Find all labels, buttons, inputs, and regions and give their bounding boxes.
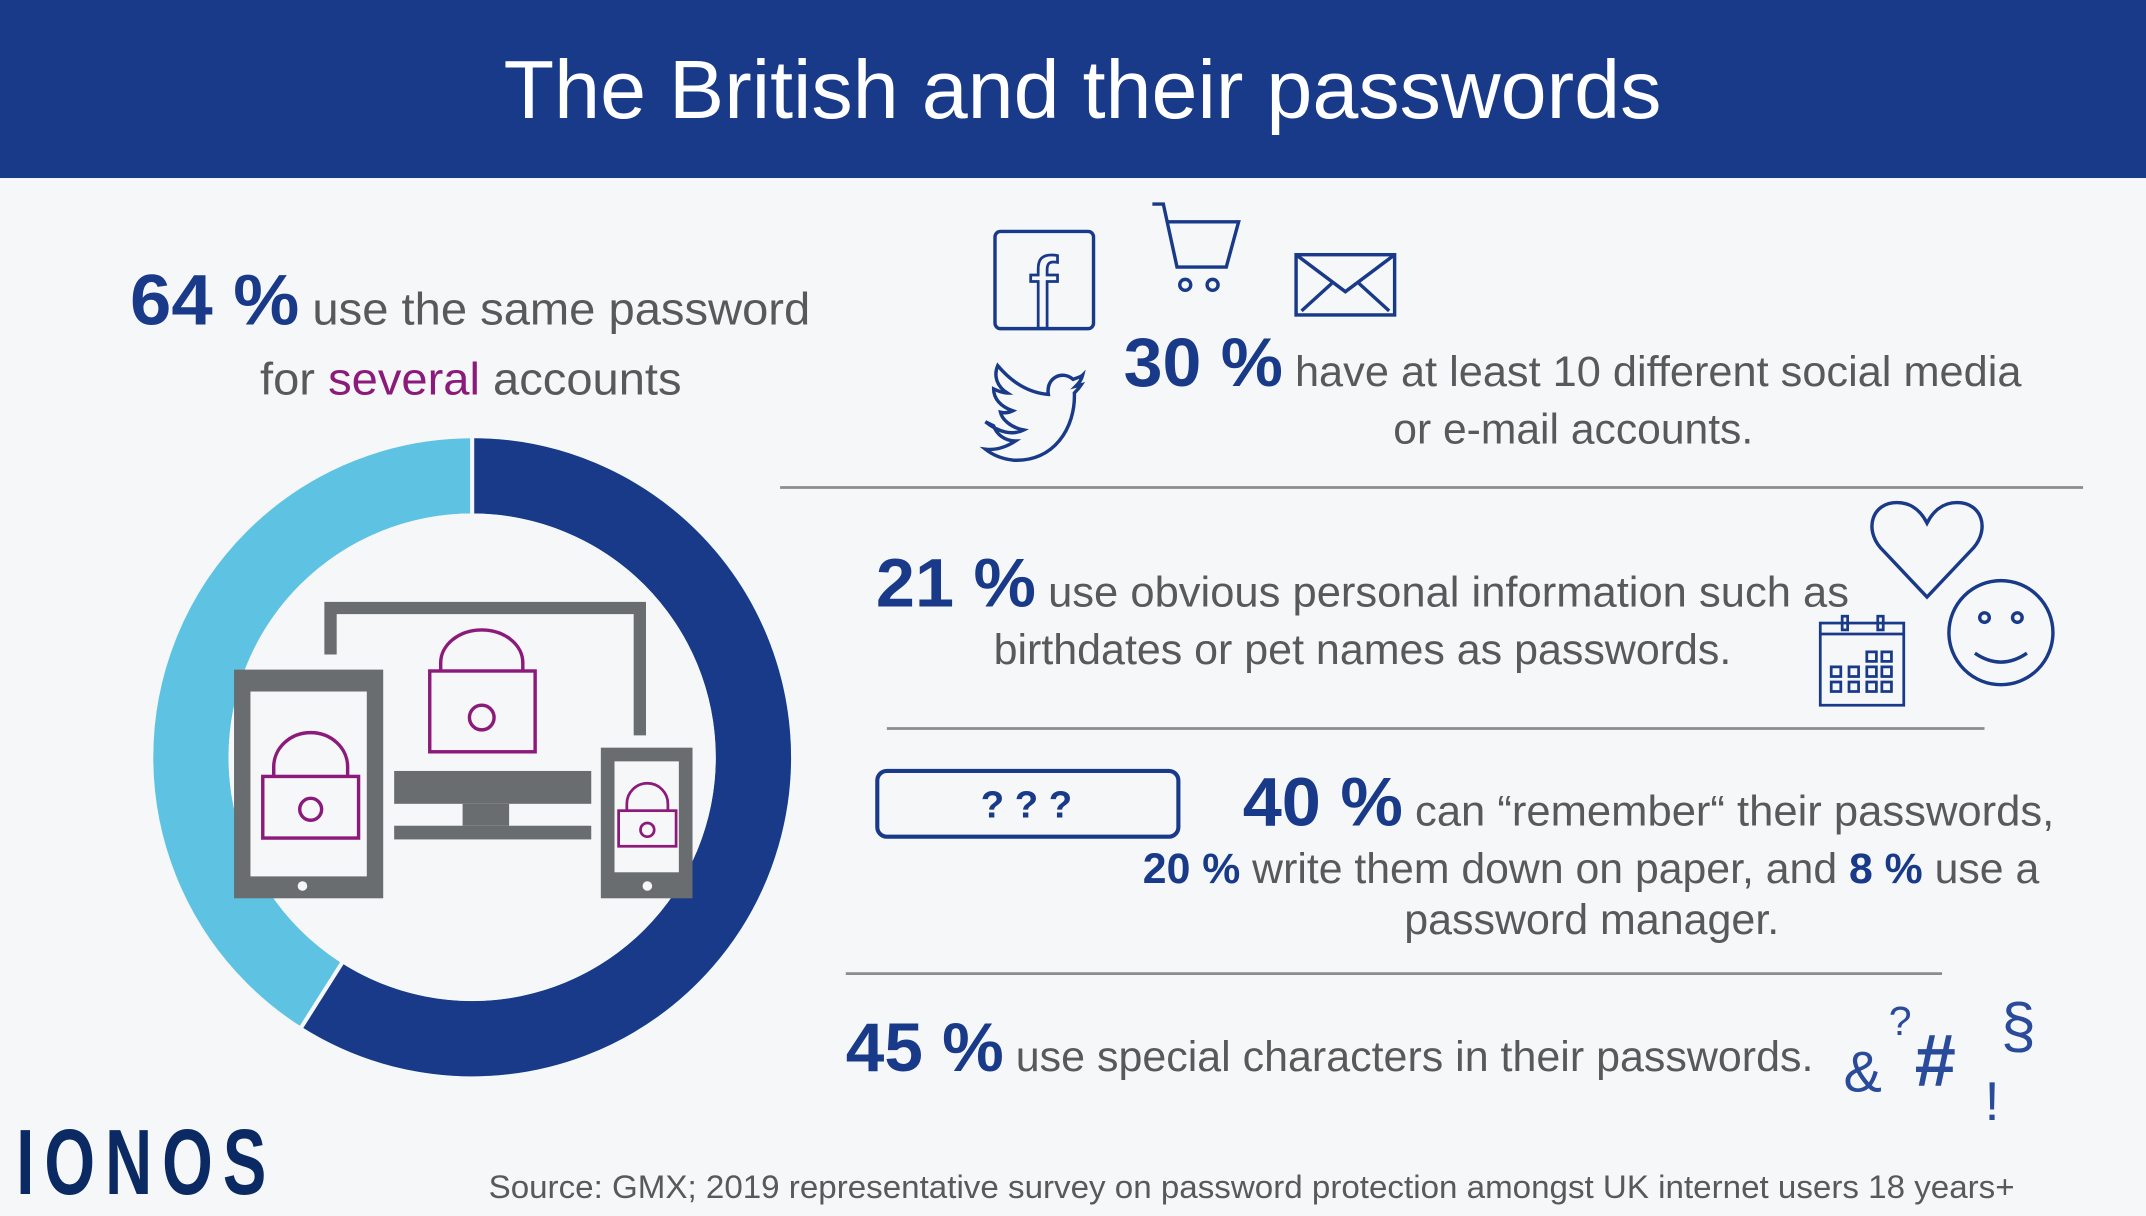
icon: special characters <box>1844 992 2036 1132</box>
icon: heart <box>1872 503 1982 597</box>
stat: 21 %: 21 % use obvious personal information such as <box>876 545 1849 622</box>
icon: password box <box>877 771 1178 837</box>
stat: 21 %: birthdates or pet names as passwords. <box>994 626 1731 673</box>
icon: special characters: § <box>2001 992 2036 1062</box>
icon: special characters: # <box>1915 1019 1956 1102</box>
icon: password box: ? ? ? <box>981 784 1072 827</box>
headline: 64 % <box>130 262 810 404</box>
stat: 40 %: 20 % write them down on paper, and 8 % use a <box>1143 845 2040 892</box>
icon: calendar <box>1820 616 1904 705</box>
headline: 64 %: for several accounts <box>260 353 682 404</box>
title: The British and their passwords <box>504 45 1662 136</box>
stat: 30 %: or e-mail accounts. <box>1393 406 1753 453</box>
icon: special characters: & <box>1844 1040 1882 1104</box>
stat: 40 % <box>1143 764 2054 943</box>
header banner <box>0 0 2146 178</box>
icon: facebook: f <box>1029 238 1058 351</box>
headline: 64 %: 64 % use the same password <box>130 262 810 341</box>
icon: twitter bird <box>985 366 1083 460</box>
donut chart <box>191 435 753 1039</box>
stat: 40 %: 40 % can “remember“ their passwords, <box>1243 764 2054 841</box>
icon: special characters: ? <box>1889 998 1912 1044</box>
logo: IONOS: IONOS <box>16 1111 266 1215</box>
stat: 30 % <box>1124 324 2022 453</box>
stat: 30 %: 30 % have at least 10 different social media <box>1124 324 2022 401</box>
icon: shopping cart <box>1152 204 1239 290</box>
source note: Source: GMX; 2019 representative survey on password protection amongst UK internet users 18 years+ <box>489 1168 2015 1205</box>
icon: devices with locks <box>234 608 693 898</box>
icon: special characters: ! <box>1985 1070 2000 1132</box>
stat: 21 % <box>876 545 1849 673</box>
stat: 45 %: 45 % use special characters in their passwords. <box>846 1009 1813 1086</box>
stat: 40 %: password manager. <box>1404 896 1779 943</box>
icon: envelope <box>1296 255 1395 315</box>
icon: facebook <box>995 231 1094 351</box>
icon: smiley <box>1949 581 2053 685</box>
